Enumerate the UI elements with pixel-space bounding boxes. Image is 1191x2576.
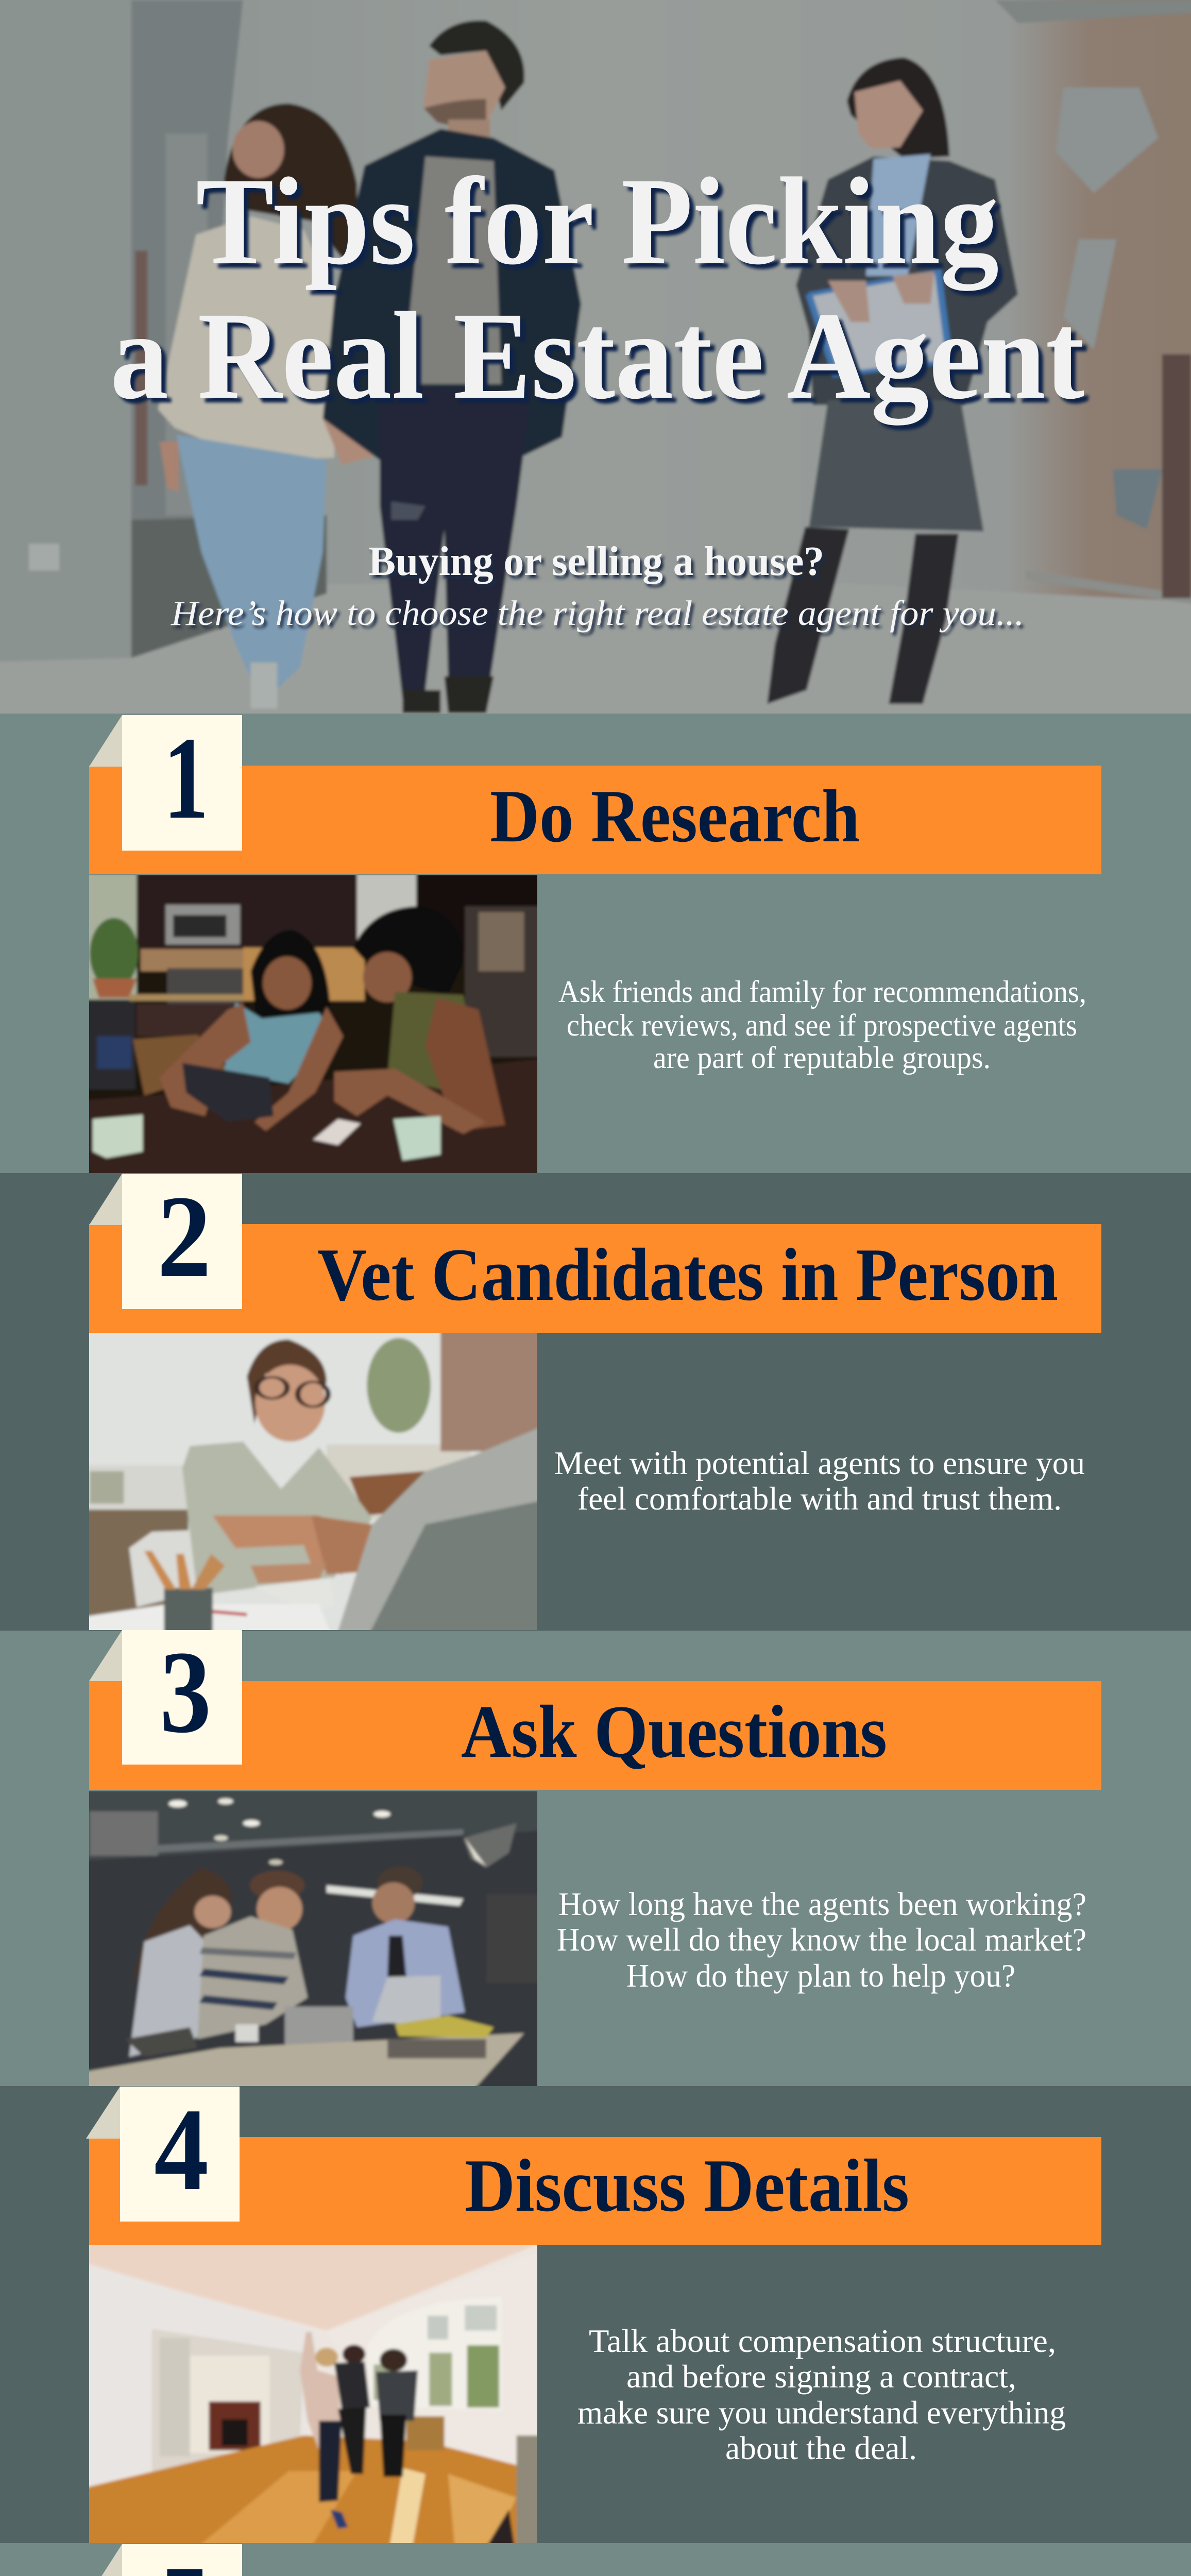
number 3: 3 [160,1626,211,1757]
body text: step 4: and before signing a contract, [626,2358,1016,2395]
number 1: 1 [163,713,209,843]
hero subtitle [171,539,1024,633]
body text: step 2: feel comfortable with and trust them. [577,1480,1062,1517]
body text: step 1 [558,975,1086,1075]
banner: step 3 [89,1681,1101,1790]
tab: step 5 [122,2544,242,2576]
hero subtitle: Here’s how to choose the right real estate agent for you... [171,594,1024,633]
body text: step 4: make sure you understand everything [577,2394,1066,2431]
body text: step 4 [577,2323,1066,2466]
hero title: Tips for Picking [196,151,999,291]
heading: discuss details: Discuss Details [465,2144,909,2227]
hero photo: couple and agent [0,0,1191,741]
panel: step 5 don't feel pressured [0,2541,1191,2576]
banner: step 1 [89,766,1101,874]
body text: step 1: Ask friends and family for recommendations, [558,975,1086,1009]
fold: step 1 [89,715,122,767]
hero subtitle: Buying or selling a house? [368,539,824,584]
hero title [110,151,1084,426]
tab: step 4 [120,2087,240,2222]
tab: step 3 [122,1630,242,1765]
photo: two women with tablet [89,875,537,1173]
panel: step 1 do research [89,715,1101,1173]
fold: step 3 [89,1630,122,1681]
fold: step 5 [89,2544,122,2576]
number 2: 2 [157,1171,211,1302]
panel: hero [0,0,1191,741]
body text: step 3: How well do they know the local market? [557,1921,1086,1958]
body text: step 2: Meet with potential agents to ensure you [554,1445,1085,1481]
tab: step 2 [122,1174,242,1309]
banner: step 2 [89,1224,1101,1333]
photo: viewing an empty home [61,2234,570,2560]
heading: ask questions: Ask Questions [461,1690,887,1773]
body text: step 4: Talk about compensation structure, [589,2323,1056,2359]
hero title: a Real Estate Agent [110,286,1084,426]
fold: step 2 [89,1174,122,1225]
heading: do research: Do Research [490,774,860,858]
number 4: 4 [154,2084,209,2215]
panel: step 2 vet candidates [0,1171,1191,1642]
body text: step 3: How do they plan to help you? [626,1957,1015,1994]
fold: step 4 [86,2087,120,2139]
body text: step 2 [554,1445,1085,1517]
body text: step 1: are part of reputable groups. [653,1041,991,1075]
heading: vet candidates in person: Vet Candidates in Person [317,1233,1058,1316]
photo: meeting in office [61,1776,570,2101]
body text: step 3: How long have the agents been working? [558,1886,1086,1922]
body text: step 1: check reviews, and see if prospective agents [567,1008,1077,1042]
panel: step 3 ask questions [89,1630,1101,2086]
body text: step 3 [557,1886,1086,1994]
banner: step 4 [89,2137,1101,2245]
body text: step 4: about the deal. [725,2430,917,2466]
tab: step 1 [122,715,242,851]
panel: step 4 discuss details [0,2084,1191,2560]
photo: handshake with agent [89,1333,537,1630]
